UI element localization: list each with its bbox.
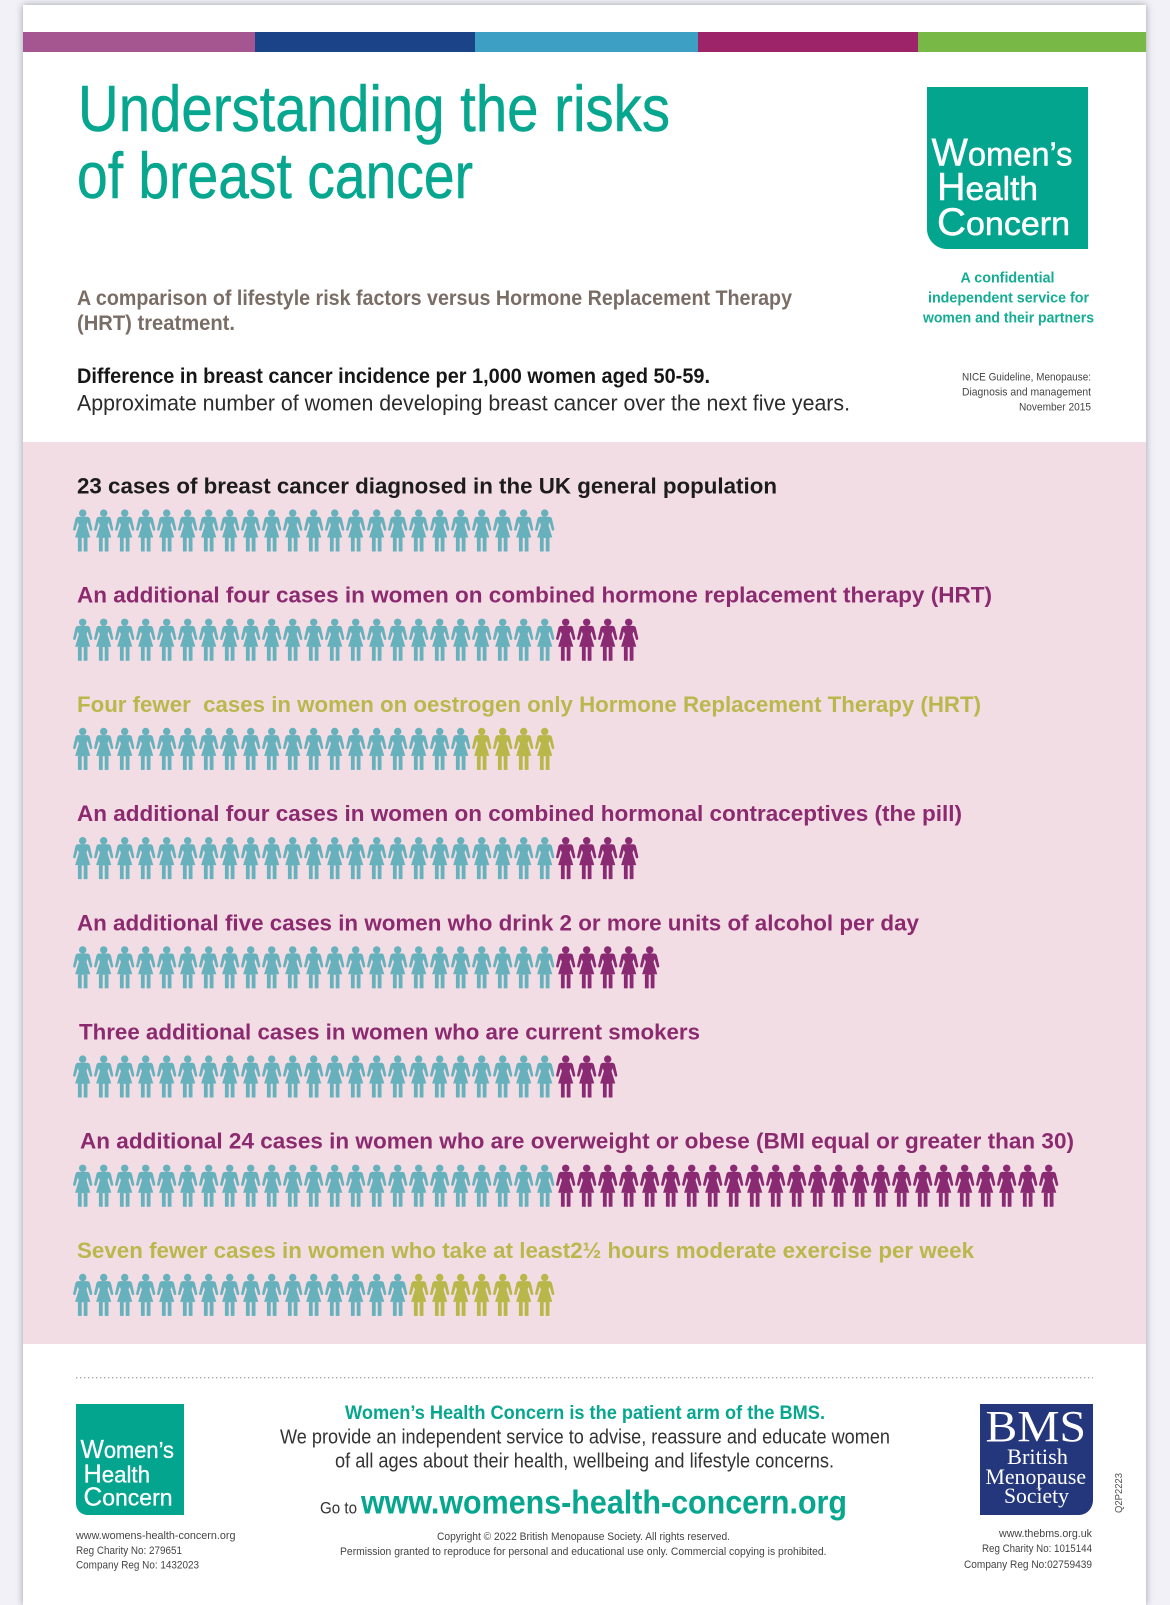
row 4: the pill: An additional four cases in women on combined hormonal contraceptives (the pill)	[77, 801, 962, 826]
subtitle: A comparison of lifestyle risk factors versus Hormone Replacement Therapy	[77, 287, 792, 310]
footer logo: Women's Health Concern: Health	[84, 1458, 150, 1488]
row 3: oestrogen only HRT: Four fewer cases in women on oestrogen only Hormone Replacement Therapy (HRT)	[77, 692, 981, 717]
incidence statement: Approximate number of women developing breast cancer over the next five years.	[77, 390, 850, 416]
footer: WHC details	[75, 1530, 235, 1572]
row 2: combined HRT	[73, 583, 992, 661]
footer: WHC details: Company Reg No: 1432023	[76, 1560, 199, 1572]
logo: Women's Health Concern: Health	[937, 166, 1038, 209]
title: of breast cancer	[77, 139, 473, 212]
subtitle: (HRT) treatment.	[77, 312, 235, 335]
logo: British Menopause Society: BMS	[986, 1402, 1086, 1451]
panel: comparison rows	[23, 442, 1146, 1344]
guideline reference: November 2015	[1019, 402, 1091, 414]
footer: BMS details	[964, 1528, 1092, 1571]
row 4: the pill	[73, 801, 962, 879]
colour band	[23, 32, 1146, 52]
row 8: exercise: Seven fewer cases in women who take at least2½ hours moderate exercise per week	[77, 1238, 975, 1263]
logo: British Menopause Society: Menopause	[986, 1464, 1086, 1489]
tagline: women and their partners	[922, 310, 1094, 326]
row 1: general population: 23 cases of breast cancer diagnosed in the UK general population	[77, 474, 777, 498]
row 2: combined HRT: An additional four cases in women on combined hormone replacement therapy (HRT)	[77, 583, 992, 608]
guideline reference: Diagnosis and management	[962, 386, 1091, 398]
logo: Women's Health Concern	[927, 87, 1088, 249]
tagline: A confidential	[960, 270, 1054, 286]
tagline: independent service for	[928, 290, 1089, 306]
footer logo: Women's Health Concern: Concern	[84, 1482, 172, 1512]
incidence statement: Difference in breast cancer incidence per 1,000 women aged 50-59.	[77, 365, 710, 388]
incidence statement	[77, 365, 850, 416]
footer: copyright: Permission granted to reproduce for personal and educational use only. Commercial copying is prohibited.	[340, 1546, 826, 1558]
row 3: oestrogen only HRT	[73, 692, 981, 770]
guideline reference: NICE Guideline, Menopause:	[962, 372, 1091, 384]
row 6: smokers: Three additional cases in women who are current smokers	[79, 1020, 700, 1044]
footer: BMS details: Reg Charity No: 1015144	[982, 1543, 1092, 1555]
footer: BMS details: www.thebms.org.uk	[998, 1528, 1092, 1540]
row 1: general population	[73, 474, 777, 552]
footer: BMS details: Company Reg No:02759439	[964, 1559, 1092, 1571]
logo: British Menopause Society: Society	[1004, 1483, 1069, 1508]
footer: about statement: We provide an independent service to advise, reassure and educate women	[280, 1426, 890, 1448]
row 6: smokers	[73, 1020, 700, 1098]
footer logo: Women's Health Concern	[76, 1404, 184, 1515]
footer: about statement: of all ages about their health, wellbeing and lifestyle concerns.	[335, 1450, 834, 1472]
footer: WHC details: www.womens-health-concern.org	[75, 1530, 235, 1542]
footer: about statement: Women’s Health Concern is the patient arm of the BMS.	[345, 1403, 825, 1424]
row 7: overweight or obese	[73, 1129, 1074, 1207]
tagline	[922, 270, 1094, 326]
row 5: alcohol	[73, 910, 920, 988]
footer: website link: www.womens-health-concern.org	[360, 1484, 847, 1520]
footer: website link: Go to	[320, 1498, 357, 1518]
row 7: overweight or obese: An additional 24 cases in women who are overweight or obese (BMI equal or greater than 30)	[80, 1129, 1074, 1154]
row 8: exercise	[73, 1238, 975, 1316]
footer: copyright	[340, 1531, 826, 1558]
guideline reference	[962, 372, 1091, 414]
subtitle	[77, 287, 792, 335]
logo: British Menopause Society	[980, 1402, 1093, 1515]
footer: WHC details: Reg Charity No: 279651	[76, 1545, 182, 1557]
footer: copyright: Copyright © 2022 British Menopause Society. All rights reserved.	[437, 1531, 730, 1543]
title	[77, 72, 670, 212]
logo: Women's Health Concern: Women’s	[932, 132, 1072, 174]
footer logo: Women's Health Concern: Women’s	[80, 1434, 174, 1464]
row 5: alcohol: An additional five cases in women who drink 2 or more units of alcohol per day	[77, 910, 920, 935]
print code: Q2P2223	[1113, 1473, 1125, 1513]
logo: Women's Health Concern: Concern	[937, 201, 1070, 244]
footer: about statement	[280, 1403, 890, 1472]
logo: British Menopause Society: British	[1007, 1444, 1068, 1469]
title: Understanding the risks	[78, 72, 670, 145]
